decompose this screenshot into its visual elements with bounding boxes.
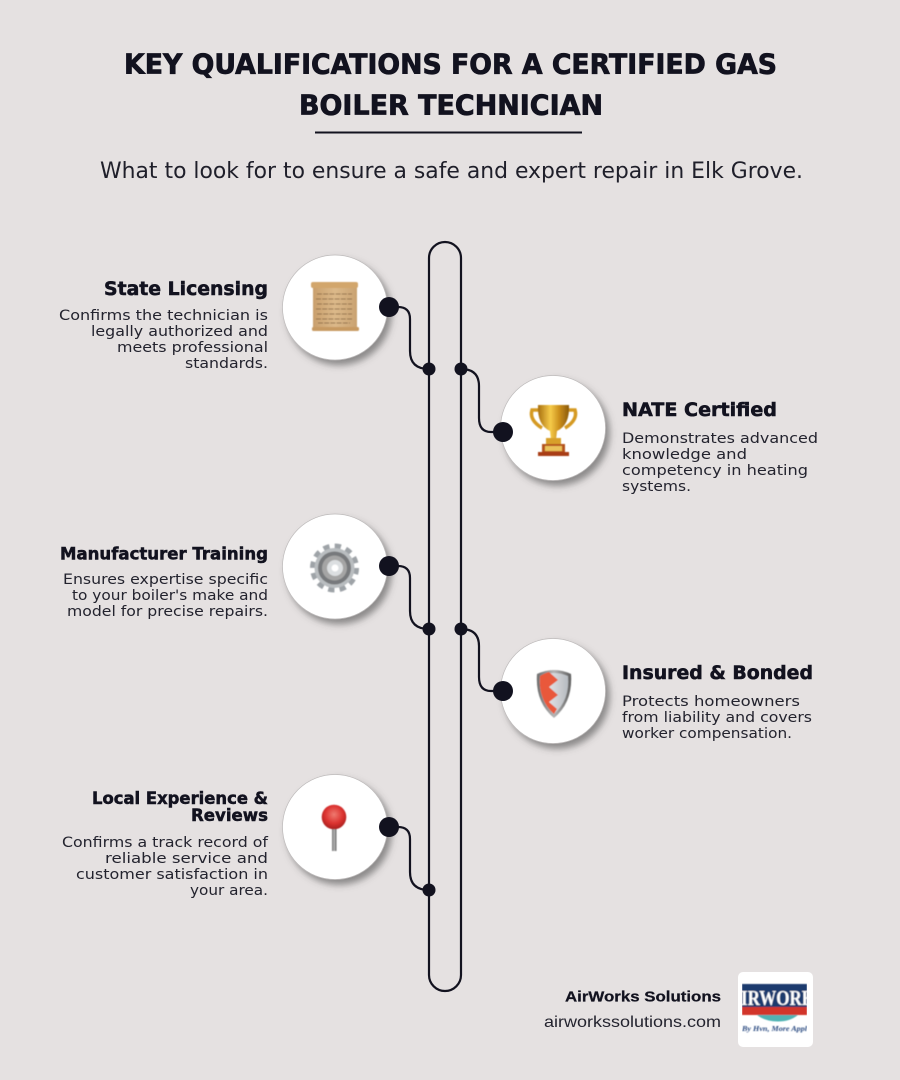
icon: scroll [311,282,359,331]
title: BOILER TECHNICIAN [299,90,603,122]
description: Insured & Bonded: Protects homeowners [622,694,800,710]
item: Insured & Bonded [493,638,813,744]
description: State Licensing [59,308,268,372]
heading: NATE Certified: NATE Certified [622,399,777,421]
description: State Licensing: legally authorized and [91,324,268,340]
footer: logo: IRWORK [741,986,816,1010]
heading: State Licensing: State Licensing [104,278,268,300]
icon: gear [314,547,356,589]
description: Manufacturer Training [63,572,268,620]
heading: Local Experience & Reviews: Local Experience & [92,789,268,808]
connectors [389,307,503,890]
footer: logo: By Hvn, More Appl [741,1024,808,1033]
heading: Manufacturer Training: Manufacturer Training [60,544,268,564]
footer: logo [738,972,816,1047]
heading: Insured & Bonded: Insured & Bonded [622,662,813,684]
item: State Licensing [59,255,399,372]
subtitle: What to look for to ensure a safe and expert repair in Elk Grove. [100,159,803,184]
small timeline nodes [422,362,468,896]
item: Local Experience & Reviews [62,774,399,899]
description: Insured & Bonded [622,694,812,742]
description: Manufacturer Training: model for precise repairs. [67,604,268,620]
description: NATE Certified: competency in heating [622,463,808,479]
description: State Licensing: Confirms the technician is [59,308,268,324]
description: Manufacturer Training: to your boiler's make and [72,588,268,604]
icon: trophy [531,405,576,456]
description: Local Experience & Reviews: customer satisfaction in [76,867,268,883]
description: Local Experience & Reviews: reliable service and [105,851,268,867]
description: Local Experience & Reviews [62,835,269,899]
item: Manufacturer Training [60,514,399,620]
description: NATE Certified: Demonstrates advanced [622,431,818,447]
title: KEY QUALIFICATIONS FOR A CERTIFIED GAS [124,48,777,80]
footer: brand text: airworkssolutions.com [544,1014,721,1031]
description: Manufacturer Training: Ensures expertise specific [63,572,268,588]
description: Insured & Bonded: worker compensation. [622,726,792,742]
description: State Licensing: standards. [185,356,268,372]
icon: shield [537,670,571,718]
footer: brand text [544,988,721,1031]
description: Local Experience & Reviews: Confirms a track record of [62,835,269,851]
heading: Local Experience & Reviews [92,789,268,825]
icon: map pin [322,805,346,851]
description: NATE Certified: knowledge and [622,447,747,463]
description: Local Experience & Reviews: your area. [190,883,268,899]
heading: Local Experience & Reviews: Reviews [191,806,268,825]
description: NATE Certified: systems. [622,479,691,495]
item: NATE Certified [493,376,818,495]
title [124,48,777,122]
description: Insured & Bonded: from liability and covers [622,710,812,726]
description: State Licensing: meets professional [117,340,268,356]
timeline track [429,242,461,991]
description: NATE Certified [622,431,818,495]
footer: brand text: AirWorks Solutions [565,988,721,1006]
